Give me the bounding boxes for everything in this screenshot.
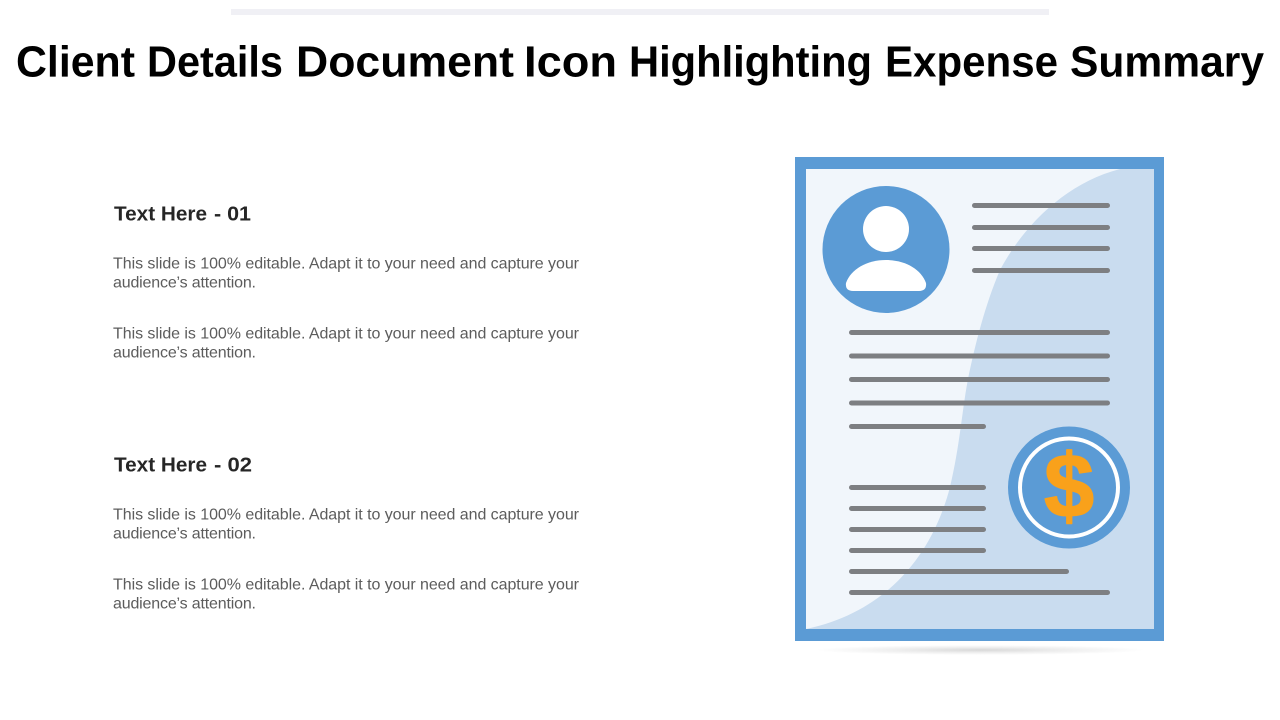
paragraph 02b: audience’s attention. [113,596,256,612]
title: Document [296,38,514,86]
heading 02: Text Here [114,454,207,476]
text block 01 [113,202,580,362]
title: Highlighting [629,38,872,86]
title [16,38,1265,86]
title: Details [147,38,283,86]
paragraph 01a [113,256,580,292]
paragraph 01a: This slide is 100% editable. Adapt it to your need and capture your [113,256,580,272]
icon: dollar coin: $ [1044,437,1094,537]
title: Expense [885,38,1058,86]
paragraph 02a [113,506,580,542]
paragraph 02b [113,576,580,612]
heading 01: - 01 [214,202,251,226]
heading 02: - 02 [214,454,252,476]
paragraph 02a: audience’s attention. [113,526,256,542]
paragraph 01b: audience’s attention. [113,344,256,362]
paragraph 01a: audience’s attention. [113,274,256,292]
paragraph 02a: This slide is 100% editable. Adapt it to your need and capture your [113,506,580,524]
heading 02 [114,454,252,476]
lower text lines [852,488,1108,592]
paragraph 01b [113,326,580,362]
text block 02 [113,454,580,612]
document shadow [815,645,1145,655]
middle text lines [852,332,1108,426]
heading 01: Text Here [114,202,207,226]
heading 01 [114,202,251,226]
paragraph 02b: This slide is 100% editable. Adapt it to your need and capture your [113,576,580,594]
curved shaded area [806,169,1154,629]
title: Client [16,38,135,86]
header text lines [974,206,1108,270]
paragraph 01b: This slide is 100% editable. Adapt it to your need and capture your [113,326,580,342]
title: Summary [1070,38,1265,86]
icon: person avatar [822,186,950,313]
document icon [795,157,1164,641]
icon: dollar coin [1008,426,1130,548]
title: Icon [524,38,617,86]
